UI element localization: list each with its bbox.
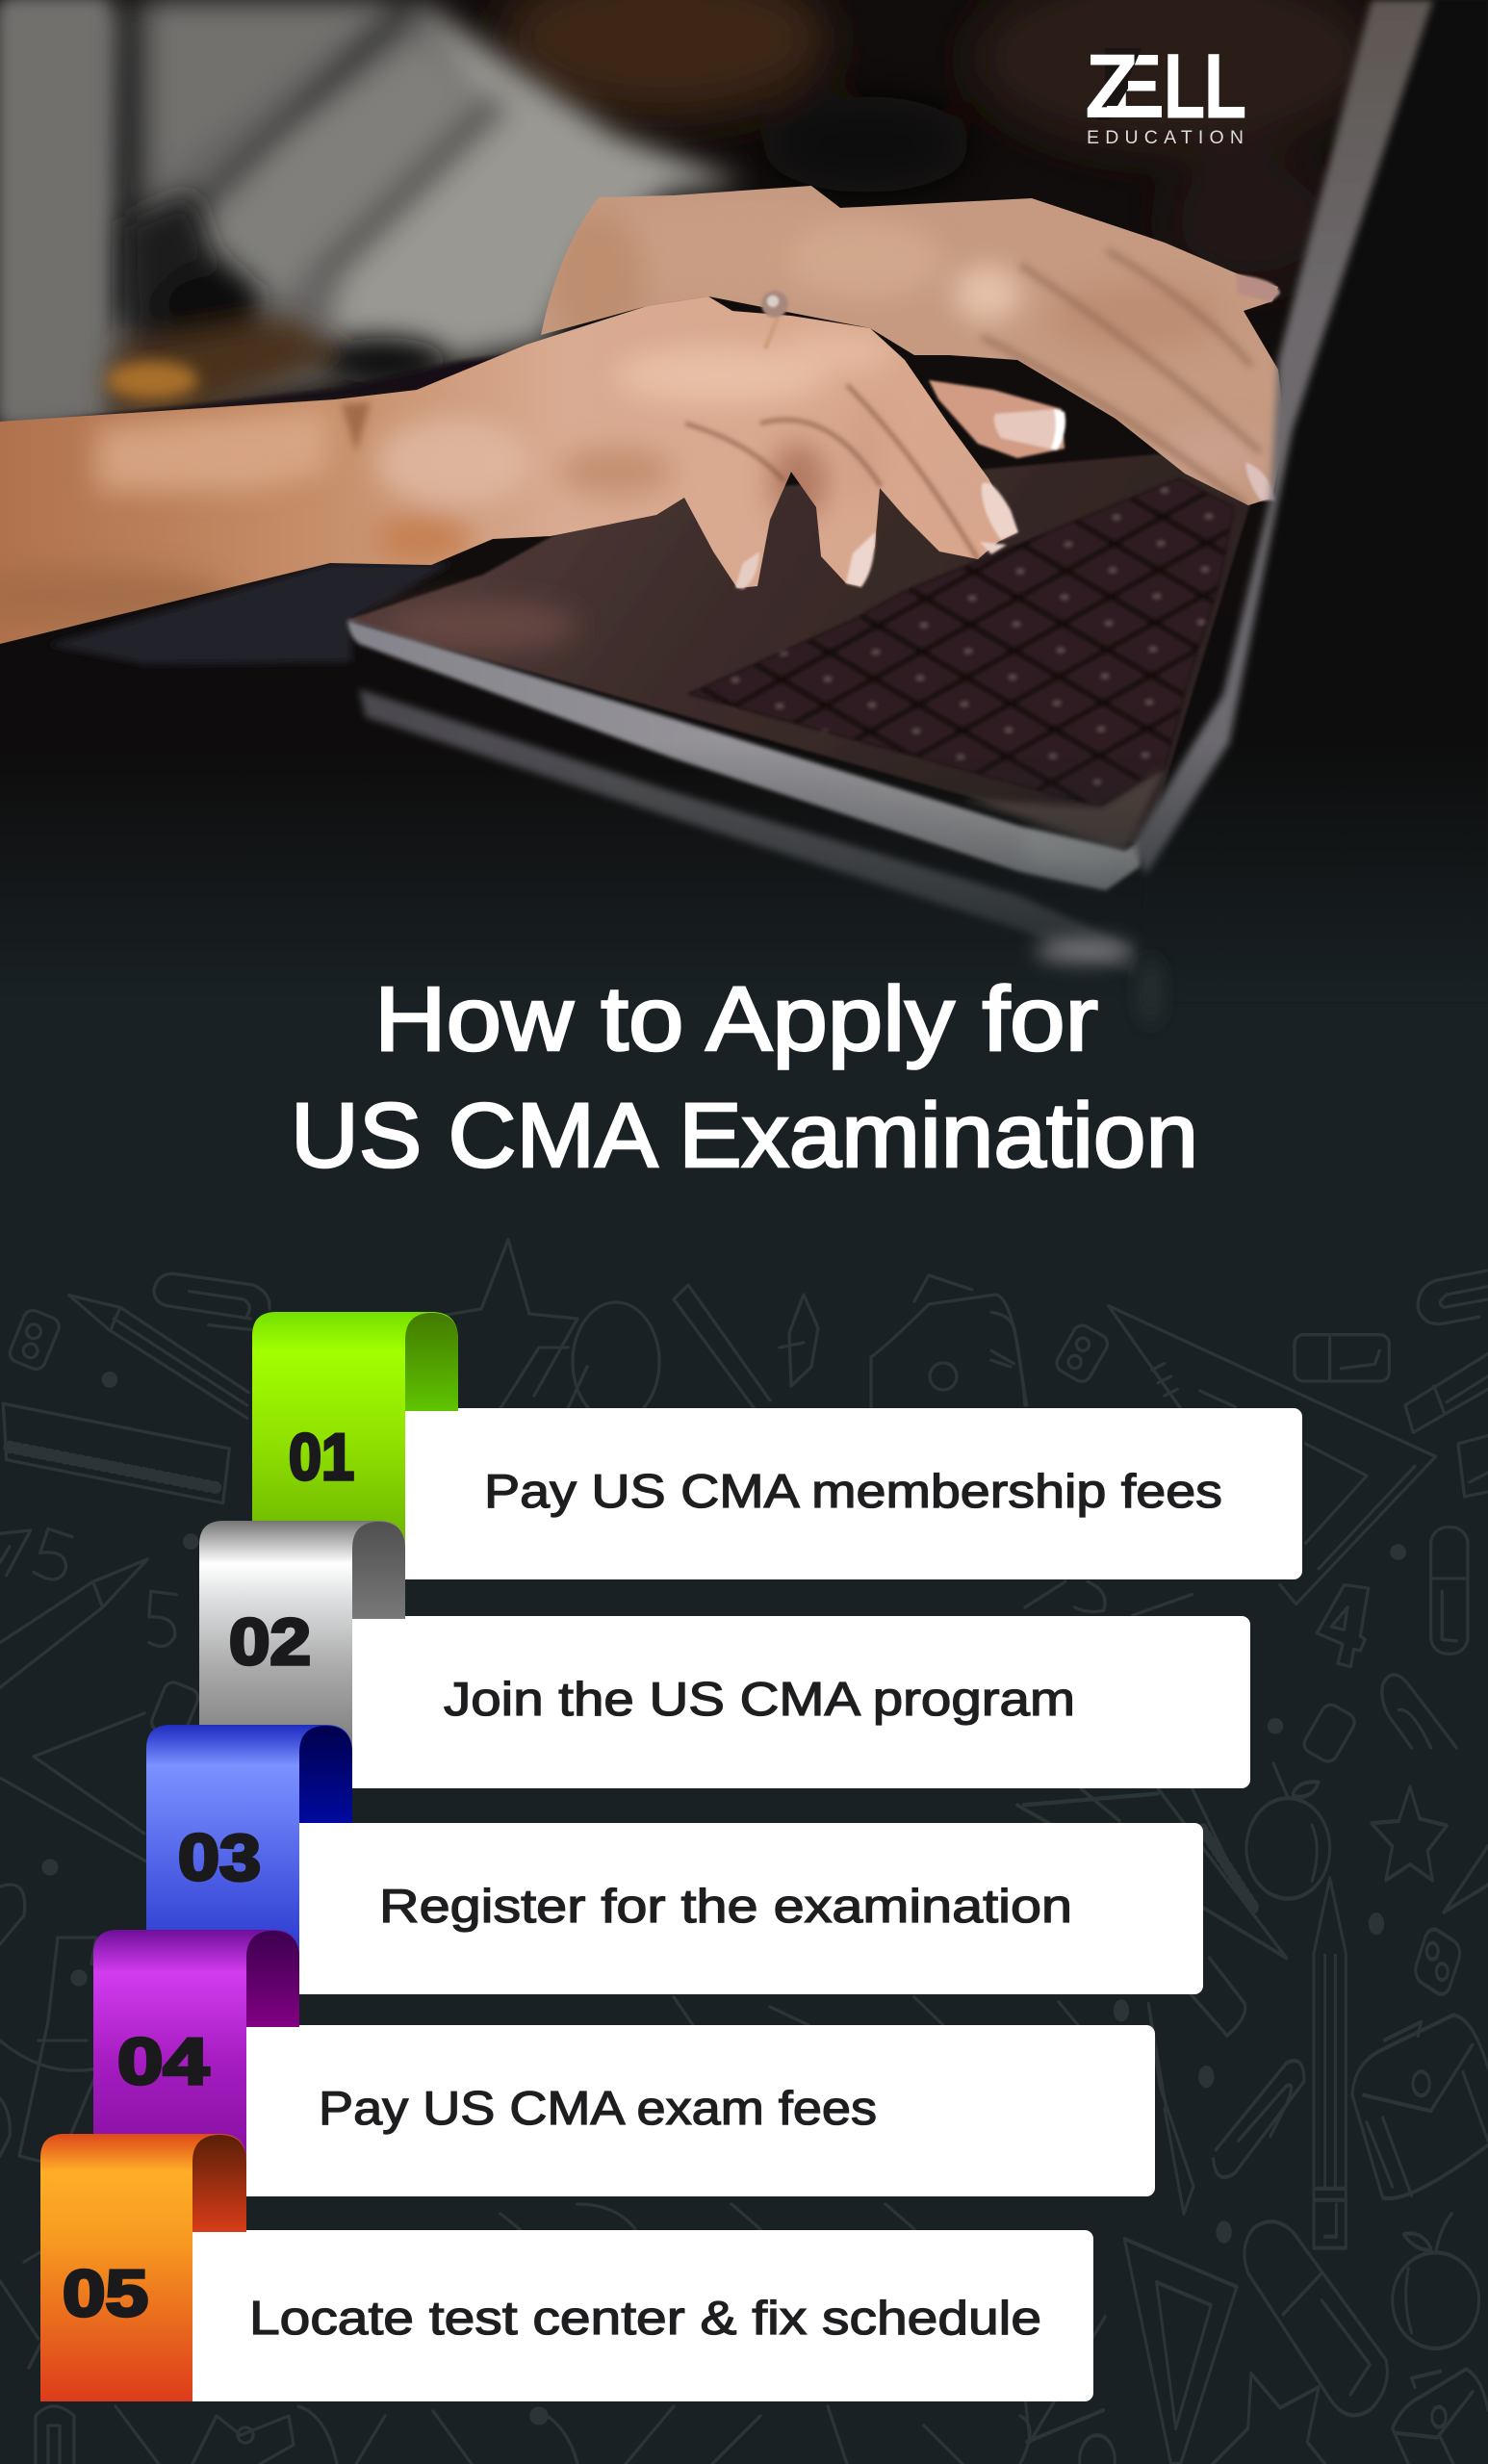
logo wordmark [1085, 36, 1246, 138]
number 05: 05 [63, 2257, 148, 2330]
number 03: 03 [178, 1821, 261, 1894]
step text 4: Pay US CMA exam fees [319, 2083, 877, 2135]
logo wordmark: Z [1085, 36, 1139, 138]
ribbon 4 [93, 1930, 299, 2196]
title line 1: How to Apply for [374, 968, 1098, 1070]
step 3 [146, 1725, 1203, 1994]
ribbon 3 [146, 1725, 352, 1994]
step text 5: Locate test center & fix schedule [249, 2293, 1041, 2345]
card 4 [226, 2025, 1155, 2196]
near hand and forearm [0, 289, 1030, 654]
logo: Zell Education [1085, 36, 1246, 148]
photo: hands typing on laptop [0, 0, 1488, 1025]
title [291, 968, 1198, 1187]
thumb and far-hand nails [929, 274, 1280, 500]
card 2 [332, 1616, 1250, 1788]
step 2 [199, 1521, 1250, 1788]
laptop screen [1134, 0, 1488, 1001]
number 04: 04 [117, 2025, 209, 2098]
step 1 [252, 1312, 1302, 1579]
ribbon fold 2 [352, 1522, 405, 1619]
ribbon fold 3 [299, 1726, 352, 1823]
number 01: 01 [289, 1421, 354, 1494]
step 5 [40, 2134, 1093, 2401]
background doodle pattern [0, 1240, 1488, 2464]
logo wordmark: L [1204, 36, 1246, 138]
logo wordmark: E [1109, 36, 1163, 138]
ribbon fold 4 [246, 1931, 299, 2027]
title line 2: US CMA Examination [291, 1085, 1198, 1187]
ribbon 1 [252, 1312, 458, 1579]
far hand [541, 186, 1282, 505]
number 02: 02 [229, 1605, 311, 1679]
step text 1: Pay US CMA membership fees [484, 1466, 1222, 1518]
card 1 [385, 1408, 1302, 1579]
step text 3: Register for the examination [379, 1881, 1072, 1933]
card 3 [279, 1823, 1203, 1994]
ribbon fold 1 [405, 1313, 458, 1411]
step text 2: Join the US CMA program [444, 1674, 1075, 1726]
ribbon 5 [40, 2134, 246, 2401]
ribbon fold 5 [192, 2135, 246, 2232]
logo subtitle: EDUCATION [1087, 127, 1244, 148]
near-hand nails and ring [735, 291, 1018, 589]
card 5 [173, 2230, 1093, 2401]
step 4 [93, 1930, 1155, 2196]
logo wordmark: L [1164, 36, 1205, 138]
ribbon 2 [199, 1521, 405, 1788]
